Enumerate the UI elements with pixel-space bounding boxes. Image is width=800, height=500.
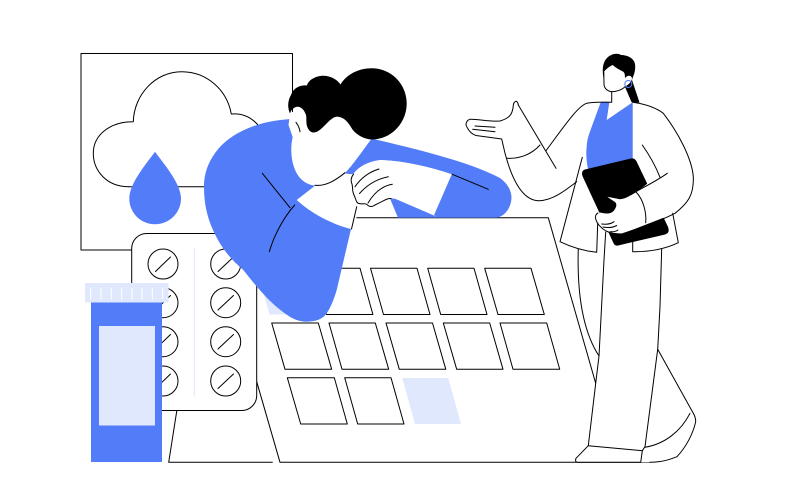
figure: doctor with tablet bbox=[466, 54, 696, 462]
doctor face bbox=[604, 65, 632, 92]
panel: desk base bbox=[169, 405, 272, 462]
doctor blue top bbox=[586, 102, 633, 170]
patient lines bbox=[262, 122, 488, 252]
patient forearm in white bbox=[351, 160, 452, 215]
patient white wrist bbox=[297, 174, 357, 229]
doctor trousers bbox=[576, 232, 696, 462]
panel: blister pack of pills bbox=[132, 234, 257, 410]
patient hair bbox=[288, 68, 407, 140]
panel: framed picture with cloud bbox=[81, 54, 292, 250]
icon: cloud outline bbox=[93, 72, 258, 187]
patient face and neck bbox=[288, 105, 371, 186]
patient blue sleeve wedge bbox=[390, 198, 437, 218]
doctor line work bbox=[466, 92, 693, 252]
panel: calendar board bbox=[256, 218, 650, 462]
icon: water drop bbox=[129, 152, 181, 224]
icon: doctor earring bbox=[625, 80, 632, 88]
patient torso in blue bbox=[204, 110, 351, 322]
doctor outstretched arm and hand bbox=[466, 101, 577, 201]
calendar day cells bbox=[256, 268, 560, 424]
patient upper arm band bbox=[345, 138, 512, 218]
doctor ponytail and hair bbox=[603, 54, 640, 102]
doctor coat bbox=[540, 102, 693, 252]
doctor holding hand and sleeve bbox=[596, 172, 693, 234]
panel: pill bottle bbox=[85, 283, 168, 462]
figure: patient leaning on calendar bbox=[204, 68, 512, 322]
doctor black tablet bbox=[583, 159, 668, 245]
